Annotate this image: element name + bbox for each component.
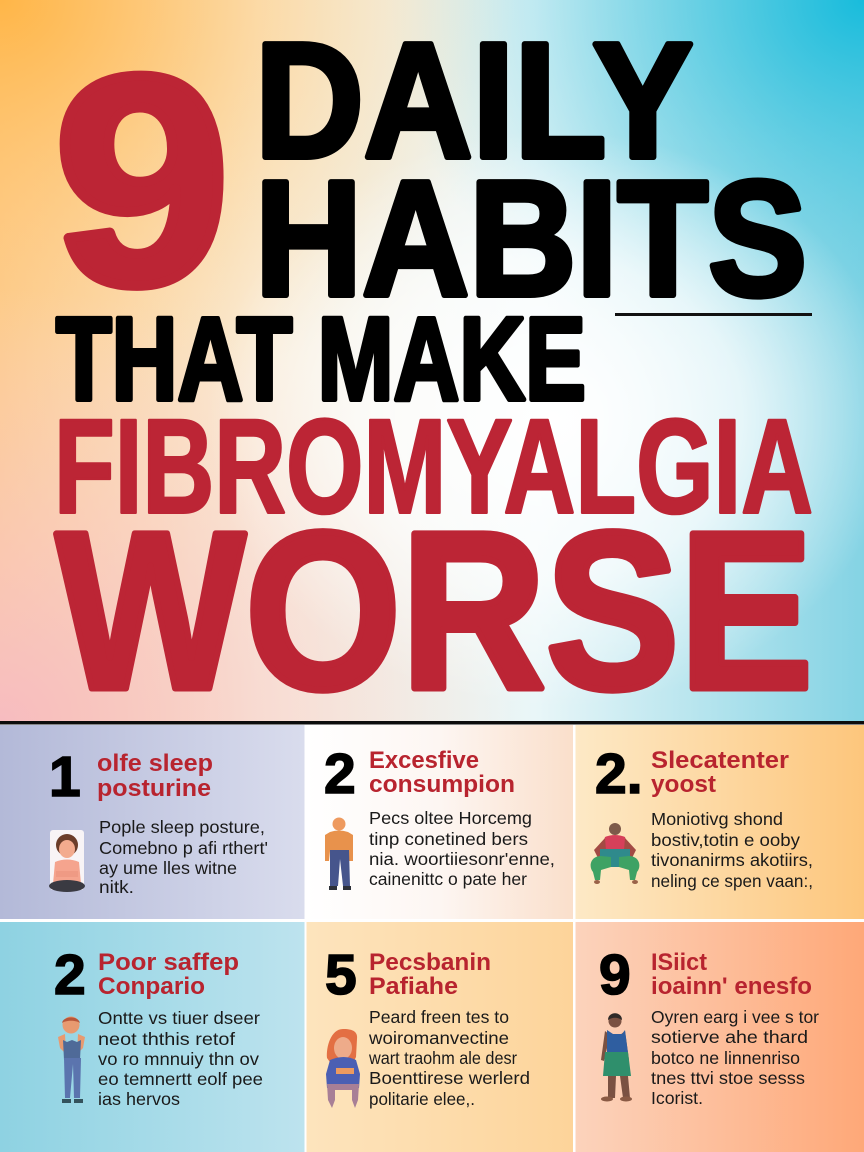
number 2: 2 (324, 742, 356, 806)
panel: habit 6 (576, 922, 864, 1152)
number 1: 1 (49, 745, 81, 809)
description 6: botco ne linnenriso (651, 1048, 800, 1068)
description 2: Pecs oltee Horcemg (369, 808, 532, 828)
title line: HABITS: HABITS (255, 147, 807, 330)
heading 3: Slecatenter (651, 747, 789, 774)
heading 6 (651, 949, 812, 1000)
heading 1 (97, 750, 213, 802)
accent rule (615, 313, 812, 316)
panel: habit 1 (0, 725, 304, 919)
section divider (0, 721, 864, 724)
header background (0, 0, 864, 722)
number 9: 9 (599, 943, 631, 1007)
description 4: ias hervos (98, 1089, 180, 1109)
description 2 (369, 808, 555, 889)
panel: habit 2 (306, 725, 573, 919)
icon: slumped person (326, 1029, 360, 1108)
description 3 (651, 809, 813, 891)
big red number 9: 9 (54, 14, 230, 346)
heading 4: Conpario (98, 973, 205, 1000)
description 1 (99, 817, 268, 897)
heading 5: Pecsbanin (369, 949, 491, 976)
description 4: neot ththis retof (98, 1029, 235, 1049)
description 4 (98, 1008, 263, 1109)
description 5: Boenttirese werlerd (369, 1068, 530, 1088)
heading 1: posturine (97, 775, 211, 802)
heading 6: ioainn' enesfo (651, 973, 812, 1000)
description 4: vo ro mnnuiy thn ov (98, 1049, 259, 1069)
title line: DAILY: DAILY (255, 9, 693, 192)
heading 3: yoost (651, 771, 716, 798)
icon: seated person (49, 830, 85, 892)
number 2: 2 (54, 943, 86, 1007)
description 3: tivonanirms akotiirs, (651, 850, 813, 870)
description 6: sotierve ahe thard (651, 1027, 808, 1047)
description 5: woiromanvectine (368, 1028, 509, 1048)
description 2: tinp conetined bers (369, 829, 528, 849)
heading 2: Excesfive (369, 747, 479, 774)
number 2.: 2. (595, 742, 643, 806)
description 5: politarie elee,. (369, 1089, 475, 1109)
icon: worried person (58, 1016, 85, 1103)
description 1: Comebno p afi rthert' (99, 838, 268, 858)
description 2: nia. woortiiesonr'enne, (369, 849, 555, 869)
description 3: bostiv,totin e ooby (651, 830, 800, 850)
description 4: eo temnertt eolf pee (98, 1069, 263, 1089)
panel: habit 5 (306, 922, 573, 1152)
heading 2: consumpion (369, 771, 515, 798)
panel: habit 3 (576, 725, 864, 919)
description 6 (651, 1007, 819, 1108)
description 6: Icorist. (651, 1088, 703, 1108)
description 2: cainenittc o pate her (369, 869, 527, 889)
heading 2 (369, 747, 515, 798)
icon: standing person in shorts (601, 1013, 632, 1102)
description 1: nitk. (99, 877, 134, 897)
description 1: ay ume lles witne (99, 858, 237, 878)
heading 6: ISiict (651, 949, 707, 976)
panel: habit 4 (0, 922, 304, 1152)
description 6: Oyren earg i vee s tor (651, 1007, 819, 1027)
heading 5 (369, 949, 491, 1000)
description 1: Pople sleep posture, (99, 817, 265, 837)
heading 1: olfe sleep (97, 750, 213, 777)
icon: standing person (325, 818, 353, 890)
number 5: 5 (325, 943, 357, 1007)
description 5 (368, 1007, 530, 1109)
title line: THAT MAKE: THAT MAKE (56, 294, 586, 426)
description 5: wart traohm ale desr (368, 1048, 517, 1068)
description 3: neling ce spen vaan:, (651, 871, 813, 891)
description 5: Peard freen tes to (369, 1007, 509, 1027)
icon: squatting person (591, 823, 639, 884)
heading 5: Pafiahe (369, 973, 458, 1000)
heading 4 (98, 949, 239, 1000)
description 3: Moniotivg shond (651, 809, 783, 829)
description 4: Ontte vs tiuer dseer (98, 1008, 260, 1028)
title (54, 9, 813, 736)
description 6: tnes ttvi stoe sesss (651, 1068, 805, 1088)
heading 3 (651, 747, 789, 798)
heading 4: Poor saffep (98, 949, 239, 976)
